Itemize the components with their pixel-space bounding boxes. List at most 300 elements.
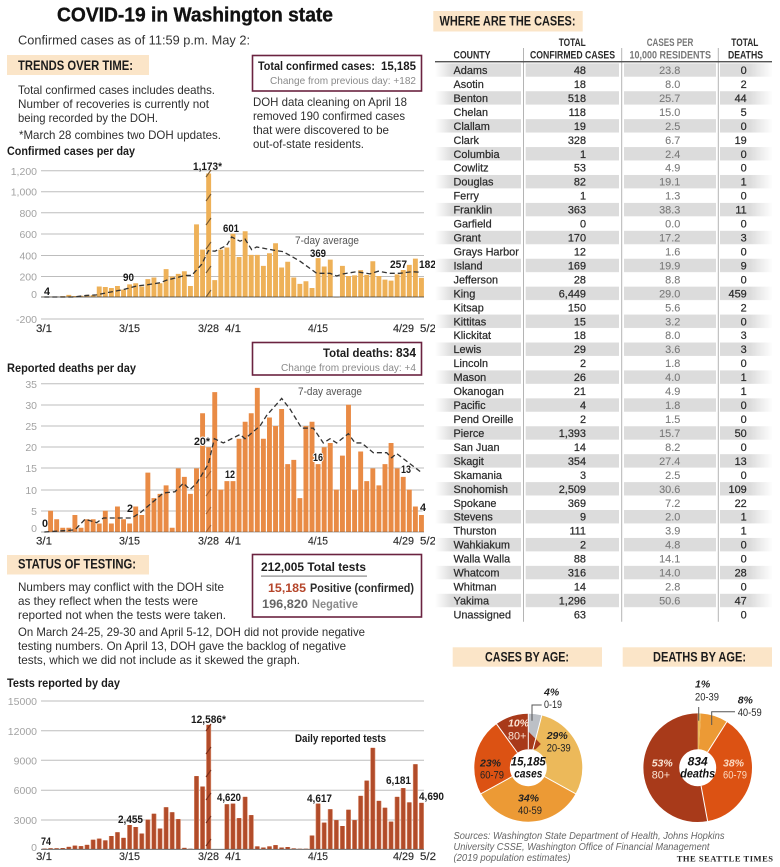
callout: total deaths — [252, 342, 422, 375]
table rows: 2,509 — [559, 484, 586, 496]
data labels: 1,173* — [193, 161, 223, 173]
bar chart: reported deaths per day — [25, 379, 436, 548]
data labels: 4,690 — [419, 791, 444, 803]
table rows: 1,296 — [559, 596, 586, 608]
table header: CASES PER — [647, 37, 694, 49]
table rows: 328 — [568, 135, 586, 147]
table header: CONFIRMED CASES — [530, 50, 615, 62]
text: testing notes: Numbers may conflict with the DOH site — [18, 580, 224, 594]
data labels — [42, 386, 426, 530]
text: DOH data cleaning note: that were discovered to be — [253, 123, 389, 137]
data labels — [44, 161, 436, 298]
table rows: Thurston — [454, 526, 496, 538]
table rows: 0 — [741, 219, 747, 231]
table rows: Stevens — [454, 512, 493, 524]
leader line: 20-39 — [698, 707, 700, 721]
heading: cases by age — [453, 647, 602, 667]
table rows: 18 — [574, 330, 586, 342]
table rows: 88 — [574, 554, 586, 566]
table rows: 3 — [741, 344, 747, 356]
data labels: 20* — [194, 436, 211, 448]
bar chart: reported deaths per day: 15 — [25, 463, 37, 475]
donut chart: cases by age — [479, 687, 576, 817]
table rows: Columbia — [454, 149, 500, 161]
table rows: 28 — [735, 568, 747, 580]
x axis dates: 3/15 — [119, 851, 140, 863]
heading: status of testing: STATUS OF TESTING: — [18, 556, 136, 572]
table rows: Grays Harbor — [454, 246, 519, 258]
data labels: 4,617 — [307, 793, 332, 805]
heading: status of testing — [7, 555, 149, 574]
bar chart: confirmed cases per day: 800 — [19, 208, 37, 220]
table rows: 0 — [741, 470, 747, 482]
table rows: Pend Oreille — [454, 414, 513, 426]
x axis dates: 3/28 — [198, 536, 219, 548]
donut labels: 10% — [508, 718, 530, 730]
bars: daily deaths — [51, 388, 421, 532]
x axis dates: 3/28 — [198, 851, 219, 863]
table rows: 170 — [568, 232, 586, 244]
bar chart: confirmed cases per day: 1,000 — [11, 186, 37, 198]
table rows: 0 — [741, 246, 747, 258]
table rows: 0 — [741, 274, 747, 286]
x axis dates: 3/15 — [119, 323, 140, 335]
table rows: 354 — [568, 456, 586, 468]
table rows: 8.0 — [665, 330, 680, 342]
chart heading: confirmed cases per day: Confirmed cases per day — [7, 144, 135, 158]
table rows: 2.5 — [665, 470, 680, 482]
text: DOH data cleaning note: removed 190 confirmed cases — [253, 109, 405, 123]
donut center: total cases — [511, 755, 546, 781]
bar chart: confirmed cases per day: 0 — [31, 289, 37, 301]
table rows: 1 — [580, 149, 586, 161]
table rows — [454, 65, 747, 621]
data labels: 182 — [419, 259, 436, 271]
table rows: Yakima — [454, 596, 490, 608]
bar chart: reported deaths per day: 10 — [25, 485, 37, 497]
table rows: 18 — [574, 79, 586, 91]
text: testing notes: tests, which we did not include as it skewed the graph. — [18, 653, 300, 667]
bar chart: reported deaths per day: 5 — [31, 506, 37, 518]
table rows: Jefferson — [454, 274, 498, 286]
table rows: 459 — [729, 288, 747, 300]
table rows: Whatcom — [454, 568, 500, 580]
table rows: Whitman — [454, 582, 496, 594]
bar chart: confirmed cases per day: 1,200 — [11, 166, 37, 178]
table rows: 1.5 — [665, 414, 680, 426]
table rows: 0 — [741, 554, 747, 566]
table rows: 316 — [568, 568, 586, 580]
callout: total confirmed cases: Change from previous day: +182 — [270, 75, 416, 87]
callout: total confirmed cases — [252, 56, 422, 91]
donut labels: 20-39 — [547, 743, 571, 755]
table rows: 4 — [580, 400, 586, 412]
table header: COUNTY — [454, 50, 490, 62]
table rows: 4.8 — [665, 540, 680, 552]
text: DOH data cleaning note — [253, 95, 407, 151]
x axis dates — [36, 851, 436, 863]
callout: total deaths: Total deaths: — [323, 346, 393, 360]
table rows: Asotin — [454, 79, 484, 91]
table rows: 44 — [735, 93, 747, 105]
donut center: total deaths: 834 — [688, 755, 708, 769]
table rows: 27.4 — [659, 456, 680, 468]
chart heading: tests reported by day: Tests reported by day — [7, 676, 120, 690]
x axis dates — [36, 323, 436, 335]
data labels: 257 — [390, 259, 407, 271]
table rows: 4.9 — [665, 386, 680, 398]
bar chart: reported deaths per day: 35 — [25, 379, 37, 391]
data labels: 16 — [313, 452, 323, 464]
table rows: 3 — [741, 232, 747, 244]
callout: testing totals: 212,005 Total tests — [261, 560, 366, 574]
text: testing notes: reported not when the tests were taken. — [18, 608, 226, 622]
title: COVID-19 in Washington state — [57, 4, 333, 26]
data labels: 7-day average — [295, 235, 359, 247]
bar chart: reported deaths per day: 30 — [25, 400, 37, 412]
data labels: 12,586* — [191, 714, 227, 726]
text: testing notes: testing numbers. On April 13, DOH gave the backlog of negative — [18, 639, 346, 653]
callout: testing totals: Negative — [312, 599, 358, 611]
table rows: 22 — [735, 498, 747, 510]
data labels: 369 — [310, 248, 326, 260]
table rows: Wahkiakum — [454, 540, 510, 552]
text: testing notes: On March 24-25, 29-30 and April 5-12, DOH did not provide negative — [18, 625, 365, 639]
table rows: 3.2 — [665, 316, 680, 328]
data labels: 2,455 — [118, 814, 143, 826]
table rows: Benton — [454, 93, 488, 105]
text: testing notes: as they reflect when the tests were — [18, 594, 198, 608]
table rows: 1.8 — [665, 400, 680, 412]
table rows: Ferry — [454, 191, 479, 203]
donut labels: 0-19 — [544, 699, 562, 711]
text: trends notes: *March 28 combines two DOH updates. — [19, 128, 221, 142]
callout: total confirmed cases: Total confirmed cases: — [258, 59, 375, 73]
table rows: Unassigned — [454, 609, 511, 621]
table rows: 0 — [741, 540, 747, 552]
table rows: 0 — [741, 400, 747, 412]
donut labels: 8% — [738, 694, 754, 706]
callout: total deaths: Change from previous day: +4 — [281, 362, 416, 374]
table rows: 0 — [741, 358, 747, 370]
data labels: 6,181 — [386, 775, 411, 787]
table rows: 14 — [574, 442, 586, 454]
x axis dates: 3/28 — [198, 323, 219, 335]
table rows: Kittitas — [454, 316, 487, 328]
callout: testing totals: Positive (confirmed) — [310, 583, 414, 595]
table rows: 1.6 — [665, 246, 680, 258]
table header: DEATHS — [728, 50, 763, 62]
callout: testing totals — [252, 554, 422, 617]
bar chart: tests reported by day: 12000 — [8, 726, 37, 738]
table rows: 363 — [568, 205, 586, 217]
x axis dates: 4/29 — [393, 851, 414, 863]
table rows: 0 — [741, 149, 747, 161]
x axis dates: 5/2 — [420, 851, 436, 863]
table rows: Garfield — [454, 219, 492, 231]
table rows: Island — [454, 260, 483, 272]
table rows: 1.3 — [665, 191, 680, 203]
table header: 10,000 RESIDENTS — [630, 50, 711, 62]
table rows: 48 — [574, 65, 586, 77]
table rows: 3.6 — [665, 344, 680, 356]
donut labels: 1% — [695, 678, 711, 690]
subtitle: Confirmed cases as of 11:59 p.m. May 2: — [18, 32, 250, 48]
heading: trends over time — [7, 55, 149, 75]
callout: total deaths: 834 — [396, 346, 416, 360]
table rows: 1,393 — [559, 428, 586, 440]
source note: University CSSE, Washington Office of Financial Management — [454, 842, 711, 853]
table rows: 29 — [574, 344, 586, 356]
table stripes — [435, 63, 773, 609]
table rows: 14 — [574, 582, 586, 594]
x axis dates: 4/15 — [308, 851, 328, 863]
table rows: 53 — [574, 163, 586, 175]
table rows: 17.2 — [659, 232, 680, 244]
donut labels: 80+ — [652, 770, 670, 782]
bar chart: confirmed cases per day — [11, 161, 436, 335]
table rows: 0 — [741, 163, 747, 175]
table rows: 0 — [741, 121, 747, 133]
table rows: Adams — [454, 65, 488, 77]
donut labels: 38% — [723, 758, 745, 770]
table rows: 4.0 — [665, 372, 680, 384]
table rows: 118 — [569, 107, 586, 119]
table rows: Mason — [454, 372, 486, 384]
table rows: 0.0 — [665, 219, 680, 231]
table rows: Skamania — [454, 470, 503, 482]
table rows: San Juan — [454, 442, 500, 454]
line: 7-day average — [44, 237, 422, 297]
heading: deaths by age — [623, 647, 772, 667]
donut labels — [479, 687, 571, 817]
x axis dates: 4/29 — [393, 536, 414, 548]
leader line: 0-19 — [532, 705, 542, 721]
bar chart: tests reported by day: 15000 — [8, 696, 37, 708]
table rows: 111 — [569, 526, 586, 538]
data labels: 74 — [41, 836, 51, 848]
table header: TOTAL — [731, 37, 759, 49]
table rows: Spokane — [454, 498, 496, 510]
x axis dates: 4/1 — [225, 323, 241, 335]
table rows: 3 — [741, 330, 747, 342]
table rows: 4.9 — [665, 163, 680, 175]
table rows: 0 — [741, 609, 747, 621]
bar chart: tests reported by day: 3000 — [14, 815, 37, 827]
table rows: 29.0 — [659, 288, 680, 300]
table header: TOTAL — [559, 37, 586, 49]
table rows: 1 — [741, 526, 747, 538]
donut center: total cases: 15,185 — [511, 755, 546, 769]
data labels: 7-day average — [298, 386, 362, 398]
table rows: 2.8 — [665, 582, 680, 594]
table rows: 14.1 — [659, 554, 680, 566]
table rows: 9 — [741, 260, 747, 272]
hatch: March 28 combined update — [206, 724, 211, 846]
logo: The Seattle Times: THE SEATTLE TIMES — [677, 854, 773, 864]
bar chart: confirmed cases per day: -200 — [16, 314, 37, 326]
donut labels: 40-59 — [738, 707, 762, 719]
table rows: 7.2 — [665, 498, 680, 510]
x axis dates: 5/2 — [420, 323, 436, 335]
table rows: Klickitat — [454, 330, 491, 342]
donut labels: 23% — [479, 758, 502, 770]
table rows: 19 — [735, 135, 747, 147]
bar chart: confirmed cases per day: 400 — [19, 250, 37, 262]
text: trends notes: being recorded by the DOH. — [18, 111, 158, 125]
table rows: 1 — [580, 191, 586, 203]
heading: where are the cases — [433, 11, 583, 32]
table header — [454, 37, 763, 62]
donut labels: 40-59 — [518, 805, 542, 817]
table rows: 2.0 — [665, 512, 680, 524]
table rows: 1 — [741, 512, 747, 524]
table rows: 21 — [574, 386, 586, 398]
table rows: 150 — [568, 302, 586, 314]
data labels: 2 — [127, 503, 133, 515]
data labels: 4 — [44, 286, 50, 298]
table rows: 38.3 — [659, 205, 680, 217]
table rows: 14.0 — [659, 568, 680, 580]
donut center: total deaths — [680, 755, 715, 781]
bars: daily cases — [44, 173, 421, 298]
data labels: 13 — [401, 464, 411, 476]
x axis dates: 4/29 — [393, 323, 414, 335]
bar chart: confirmed cases per day: 200 — [19, 272, 37, 284]
table rows: 6.7 — [665, 135, 680, 147]
x axis dates: 3/1 — [36, 536, 52, 548]
table rows: Cowlitz — [454, 163, 489, 175]
source note: (2019 population estimates) — [454, 853, 570, 864]
table rows: Lincoln — [454, 358, 488, 370]
donut labels: 34% — [518, 793, 540, 805]
table rows: 19.9 — [659, 260, 680, 272]
table rows: 0 — [741, 316, 747, 328]
data labels: 4,620 — [217, 792, 241, 804]
table rows: 169 — [568, 260, 586, 272]
table rows: 8.8 — [665, 274, 680, 286]
x axis dates: 3/1 — [36, 323, 52, 335]
table: cases by county — [435, 37, 773, 622]
table rows: Pierce — [454, 428, 484, 440]
table rows: Skagit — [454, 456, 484, 468]
table rows: 1 — [741, 386, 747, 398]
table rows: 2 — [580, 414, 586, 426]
table rows: 5 — [741, 107, 747, 119]
bar chart: reported deaths per day: 25 — [25, 421, 37, 433]
table rows: Kitsap — [454, 302, 484, 314]
text: DOH data cleaning note: DOH data cleaning on April 18 — [253, 95, 407, 109]
x axis dates: 5/2 — [420, 536, 436, 548]
table rows: Franklin — [454, 205, 492, 217]
table rows: 47 — [735, 596, 747, 608]
x axis dates: 4/15 — [308, 323, 328, 335]
table rows: 19 — [574, 121, 586, 133]
table rows: 3.9 — [665, 526, 680, 538]
table rows: Grant — [454, 232, 481, 244]
table rows: 1 — [741, 372, 747, 384]
data labels: 4 — [420, 502, 426, 514]
bars: daily tests — [44, 725, 421, 849]
table rows: Walla Walla — [454, 554, 511, 566]
table rows: 2 — [741, 79, 747, 91]
table rows: 25.7 — [659, 93, 680, 105]
table rows: Clark — [454, 135, 479, 147]
hatch: March 28 combined update — [206, 170, 211, 297]
table rows: 82 — [574, 177, 586, 189]
table rows: 109 — [729, 484, 747, 496]
x axis dates — [36, 536, 436, 548]
donut labels: 4% — [543, 687, 560, 699]
bar chart: tests reported by day — [8, 696, 444, 863]
line: 7-day average — [44, 398, 422, 532]
table rows: 15.7 — [659, 428, 680, 440]
table rows: 15 — [574, 316, 586, 328]
donut labels: 80+ — [508, 730, 526, 742]
table rows: 5.6 — [665, 302, 680, 314]
table rows: Lewis — [454, 344, 482, 356]
x axis dates: 3/1 — [36, 851, 52, 863]
table rows: 13 — [735, 456, 747, 468]
table rows: 15.0 — [659, 107, 680, 119]
donut labels: 53% — [652, 758, 673, 770]
table rows: 369 — [568, 498, 586, 510]
table rows: Clallam — [454, 121, 490, 133]
table rows: 6,449 — [559, 288, 586, 300]
bar chart: confirmed cases per day: 600 — [19, 229, 37, 241]
text: trends notes: Total confirmed cases includes deaths. — [18, 83, 215, 97]
donut labels: 60-79 — [723, 770, 747, 782]
table rows: 0 — [741, 191, 747, 203]
table rows: Okanogan — [454, 386, 504, 398]
callout: testing totals: 15,185 — [268, 581, 306, 595]
leader line: 40-59 — [712, 712, 735, 725]
table rows: 23.8 — [659, 65, 680, 77]
heading: where are the cases: WHERE ARE THE CASES: — [440, 14, 576, 28]
x axis dates: 4/1 — [225, 851, 241, 863]
table rows: Pacific — [454, 400, 486, 412]
bar chart: tests reported by day: 9000 — [14, 756, 37, 768]
table rows: 1 — [741, 177, 747, 189]
table rows: 2.4 — [665, 149, 680, 161]
x axis dates: 4/15 — [308, 536, 328, 548]
data labels: 601 — [223, 223, 239, 235]
donut center: total cases: cases — [514, 767, 543, 781]
table rows: 3 — [580, 470, 586, 482]
table rows: Douglas — [454, 177, 494, 189]
bar chart: reported deaths per day: 0 — [31, 523, 37, 535]
x axis dates: 4/1 — [225, 536, 241, 548]
table rows: 1.8 — [665, 358, 680, 370]
chart heading: reported deaths per day: Reported deaths per day — [7, 361, 136, 375]
bar chart: tests reported by day: 6000 — [14, 785, 37, 797]
table rows: 50.6 — [659, 596, 680, 608]
table rows: 63 — [574, 609, 586, 621]
table rows: 11 — [735, 205, 747, 217]
table rows: 50 — [735, 428, 747, 440]
donut labels: 60-79 — [480, 770, 504, 782]
table rows: 0 — [741, 442, 747, 454]
source note: Sources: Washington State Department of Health, Johns Hopkins — [454, 831, 724, 842]
table rows: 8.0 — [665, 79, 680, 91]
table rows: King — [454, 288, 475, 300]
heading: cases by age: CASES BY AGE: — [485, 650, 569, 665]
data labels: 12 — [225, 469, 235, 481]
table rows: 8.2 — [665, 442, 680, 454]
donut labels: 20-39 — [695, 692, 719, 704]
table rows: Snohomish — [454, 484, 508, 496]
donut chart: deaths by age — [652, 678, 762, 821]
